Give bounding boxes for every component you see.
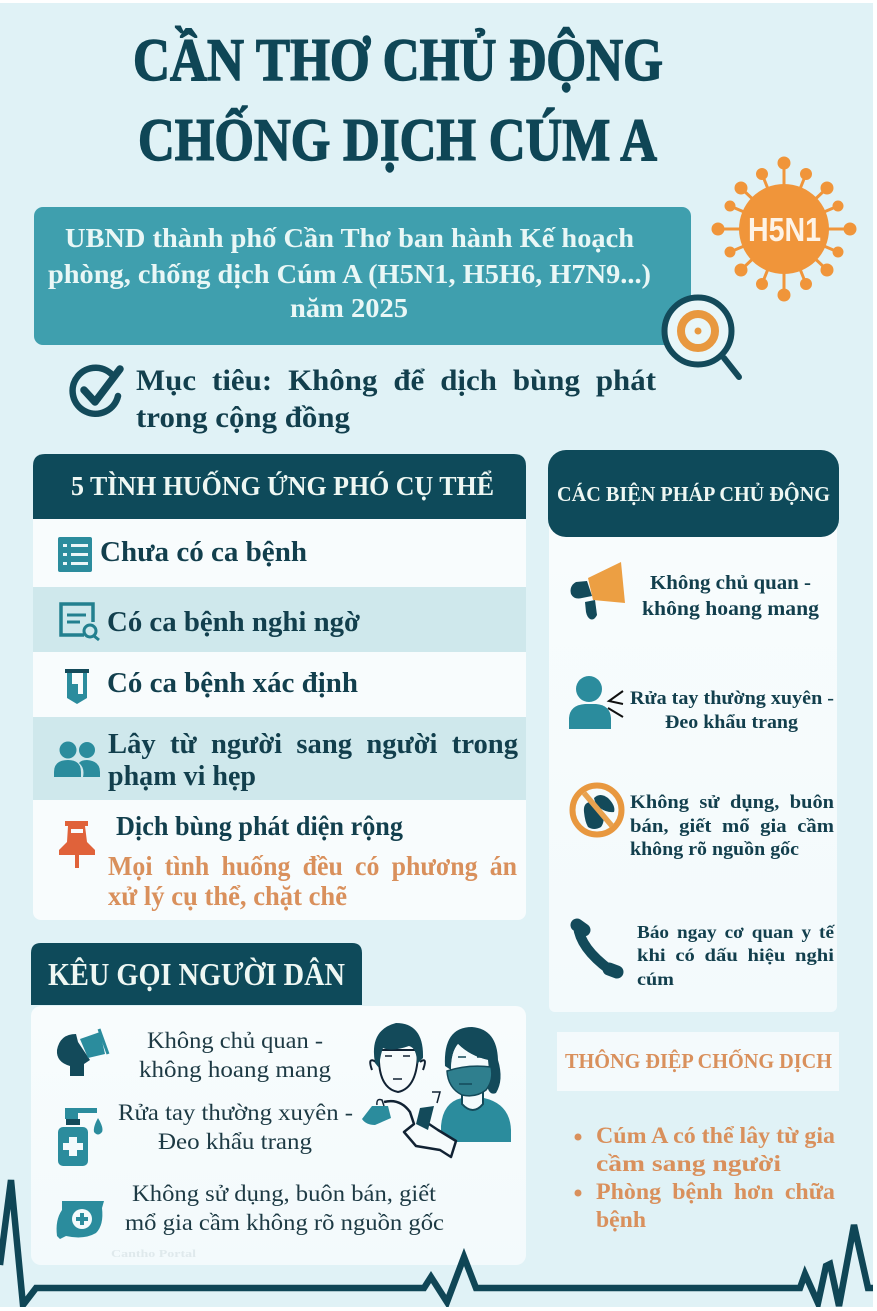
title: CHỐNG DỊCH CÚM A [138,107,657,173]
measure 1 [642,572,819,620]
hands and bottle [362,1092,456,1157]
measure 1: Không chủ quan - [650,572,811,594]
panel header: 5 scenarios [33,454,526,519]
message bullets: cầm sang người [596,1151,782,1176]
woman [441,1027,511,1142]
measure 4: khi có dấu hiệu nghi [637,945,834,965]
call 2: Đeo khẩu trang [158,1129,313,1154]
panel: 5 response scenarios [33,454,526,920]
panel header: proactive measures: CÁC BIỆN PHÁP CHỦ ĐỘNG [557,482,830,506]
measure 4: Báo ngay cơ quan y tế [637,922,835,942]
icon: telephone [577,925,617,972]
measure 3: bán, giết mổ gia cầm [630,816,834,837]
scenario 4: Lây từ người sang người trong [108,729,518,760]
measure 2: Đeo khẩu trang [665,712,799,733]
measure 4 [637,922,835,989]
scenario 1: Chưa có ca bệnh [100,537,307,568]
title [133,27,663,173]
intro banner: UBND thành phố Cần Thơ ban hành Kế hoạch [65,223,634,253]
call 3: Không sử dụng, buôn bán, giết [132,1181,437,1206]
icon: test tube [65,669,89,704]
intro banner: năm 2025 [290,293,408,323]
measure 2: Rửa tay thường xuyên - [630,688,834,709]
goal text: Mục tiêu: Không để dịch bùng phát [136,364,656,397]
illustration: man and masked woman [362,1023,511,1157]
call 2 [118,1100,353,1154]
message bullets: Cúm A có thể lây từ gia [596,1123,836,1148]
intro banner [34,207,691,345]
intro banner: phòng, chống dịch Cúm A (H5N1, H5H6, H7N9...) [48,259,651,289]
icon: person speaking [569,676,623,729]
measure 3: Không sử dụng, buôn [630,792,834,813]
call 1: Không chủ quan - [147,1028,323,1053]
scenario 4 [108,729,518,792]
icon: document search [61,604,99,640]
goal text [136,364,656,434]
panel title: anti-epidemic message [557,1032,839,1091]
icon: H5N1 virus: H5N1 [748,211,821,248]
goal text: trong cộng đồng [136,401,350,434]
panel header: call to citizens: KÊU GỌI NGƯỜI DÂN [48,956,345,992]
panel header: proactive measures [548,450,839,537]
icon: list [58,537,92,572]
icon: magnifier target [664,298,739,377]
icon: hand sanitizer [58,1108,102,1166]
measure 4: cúm [637,969,674,989]
icon: head with megaphone [57,1029,108,1076]
measure 2 [630,688,834,733]
icon: H5N1 virus [713,158,855,300]
icon: people [54,742,100,777]
title: CẦN THƠ CHỦ ĐỘNG [133,27,663,93]
call 2: Rửa tay thường xuyên - [118,1100,353,1125]
scenario 5: Dịch bùng phát diện rộng [116,811,403,841]
measure 3 [630,792,834,860]
icon: push pin [59,821,95,868]
message bullets: Phòng bệnh hơn chữa [596,1179,836,1204]
icon: goal check mark [73,368,120,414]
panel: call to citizens [31,943,526,1265]
scenario 4: phạm vi hẹp [108,761,256,792]
panel: proactive measures [548,450,839,1012]
scenario 3: Có ca bệnh xác định [107,668,358,699]
icon: megaphone [571,562,625,620]
panel header: call to citizens [31,943,362,1005]
message bullets [574,1123,836,1232]
measure 1: không hoang mang [642,598,819,620]
call 3: mổ gia cầm không rõ nguồn gốc [125,1210,444,1235]
call 1 [139,1028,332,1082]
scenario note: xử lý cụ thể, chặt chẽ [108,881,347,911]
man [370,1023,425,1092]
watermark: Cantho Portal [111,1248,196,1260]
ECG heartbeat line [0,1180,873,1306]
call 1: không hoang mang [139,1057,332,1082]
icon: medical cross badge [57,1201,104,1239]
message bullets: bệnh [596,1207,646,1232]
scenario 2: Có ca bệnh nghi ngờ [107,607,361,638]
call 3 [125,1181,444,1235]
icon: no poultry [572,786,622,834]
scenario note: Mọi tình huống đều có phương án [108,851,517,881]
panel title: anti-epidemic message: THÔNG ĐIỆP CHỐNG DỊCH [565,1049,832,1073]
scenario note [108,851,517,911]
panel header: 5 scenarios: 5 TÌNH HUỐNG ỨNG PHÓ CỤ THỂ [71,470,494,501]
measure 3: không rõ nguồn gốc [630,839,799,860]
